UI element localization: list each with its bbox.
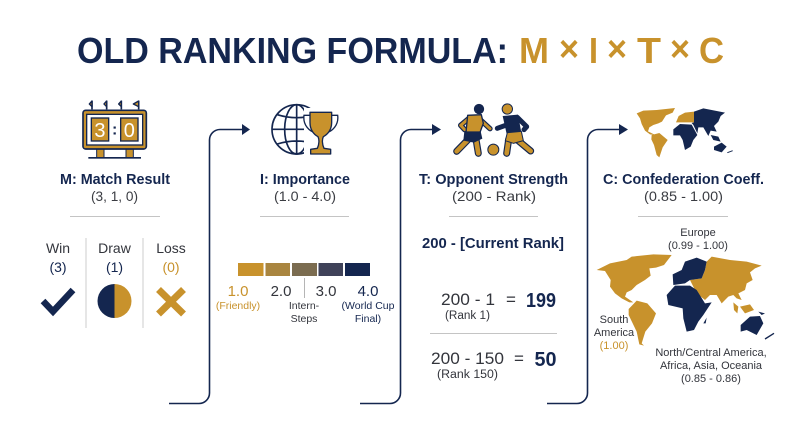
label: europe: Europe — [680, 227, 716, 239]
icon: half circle — [98, 284, 132, 318]
scale label: 3.0: 3.0 — [316, 283, 336, 300]
formula text: 200 - [Current Rank] — [422, 236, 564, 252]
label: south america: America — [594, 327, 635, 339]
icon: globe and trophy — [272, 105, 342, 160]
large world map — [597, 254, 774, 346]
panel: importance — [216, 105, 395, 325]
example: rank 150: 200 - 150 — [431, 349, 504, 368]
title — [77, 28, 724, 71]
icon: cross — [158, 290, 184, 314]
label: europe: (0.99 - 1.00) — [668, 240, 728, 252]
icon: scoreboard: : — [112, 122, 117, 139]
scale label: 4.0 world cup final: (World Cup — [342, 300, 395, 312]
title: × — [559, 28, 579, 69]
scale label: intern-steps: Steps — [291, 313, 317, 325]
example: rank 1: 200 - 1 — [441, 290, 495, 309]
arrow: I to T — [360, 124, 441, 404]
label: europe — [668, 227, 728, 252]
subheading: M: (3, 1, 0) — [91, 188, 138, 204]
panel: confederation coefficient — [594, 108, 774, 385]
label: draw: Draw — [98, 240, 132, 256]
scale label: 2.0: 2.0 — [271, 283, 291, 300]
heading: T: T: Opponent Strength — [419, 172, 568, 188]
scale label: 1.0 friendly: 1.0 — [228, 283, 248, 300]
scale label: 4.0 world cup final: Final) — [355, 313, 381, 325]
scale label: 1.0 friendly — [216, 283, 260, 312]
icon: scoreboard — [83, 101, 146, 159]
icon: scoreboard: 0 — [124, 120, 135, 142]
icon: small world map — [637, 108, 733, 157]
example: rank 1: = — [506, 290, 516, 309]
arrow: M to I — [169, 124, 250, 404]
arrow: T to C — [547, 124, 628, 404]
icon: two players — [457, 104, 531, 155]
title: I — [589, 30, 598, 71]
label: other confederations: Africa, Asia, Oceania — [660, 360, 763, 372]
label: loss: (0) — [162, 259, 180, 275]
example: rank 1: (Rank 1) — [445, 310, 490, 322]
label: other confederations: (0.85 - 0.86) — [681, 373, 741, 385]
label: win — [46, 240, 70, 275]
label: south america: (1.00) — [600, 340, 628, 352]
scale label: 4.0 world cup final — [342, 283, 395, 325]
title: × — [607, 28, 627, 69]
label: draw — [98, 240, 132, 275]
subheading: T: (200 - Rank) — [452, 188, 536, 204]
scale bar — [238, 263, 370, 276]
title: × — [670, 28, 690, 69]
icon: scoreboard: 3 — [94, 120, 106, 142]
label: draw: (1) — [106, 259, 123, 275]
scale label: intern-steps: Intern- — [289, 300, 320, 312]
title: M — [519, 30, 549, 71]
example: rank 150: 50 — [534, 349, 556, 371]
icon: check mark — [43, 290, 73, 312]
title: OLD RANKING FORMULA: — [77, 30, 508, 71]
label: loss — [156, 240, 186, 275]
example: rank 150: = — [514, 349, 524, 368]
scale label: 4.0 world cup final: 4.0 — [358, 283, 378, 300]
label: win: (3) — [49, 259, 67, 275]
label: south america — [594, 314, 635, 352]
label: loss: Loss — [156, 240, 186, 256]
scale label: intern-steps — [289, 300, 320, 325]
label: other confederations — [655, 347, 767, 385]
label: south america: South — [600, 314, 628, 326]
subheading: I: (1.0 - 4.0) — [274, 188, 336, 204]
example: rank 150 — [431, 349, 556, 381]
heading: C: C: Confederation Coeff. — [603, 172, 764, 188]
label: other confederations: North/Central America, — [655, 347, 767, 359]
label: win: Win — [46, 240, 70, 256]
title: C — [699, 30, 724, 71]
example: rank 1: 199 — [526, 290, 556, 312]
heading: M: M: Match Result — [60, 172, 170, 188]
scale label: 1.0 friendly: (Friendly) — [216, 300, 260, 312]
panel: match result — [43, 101, 186, 328]
example: rank 1 — [441, 290, 556, 322]
panel: opponent strength — [419, 104, 568, 381]
subheading: C: (0.85 - 1.00) — [644, 188, 723, 204]
title: T — [637, 30, 661, 71]
example: rank 150: (Rank 150) — [437, 369, 498, 381]
heading: I: I: Importance — [260, 172, 350, 188]
